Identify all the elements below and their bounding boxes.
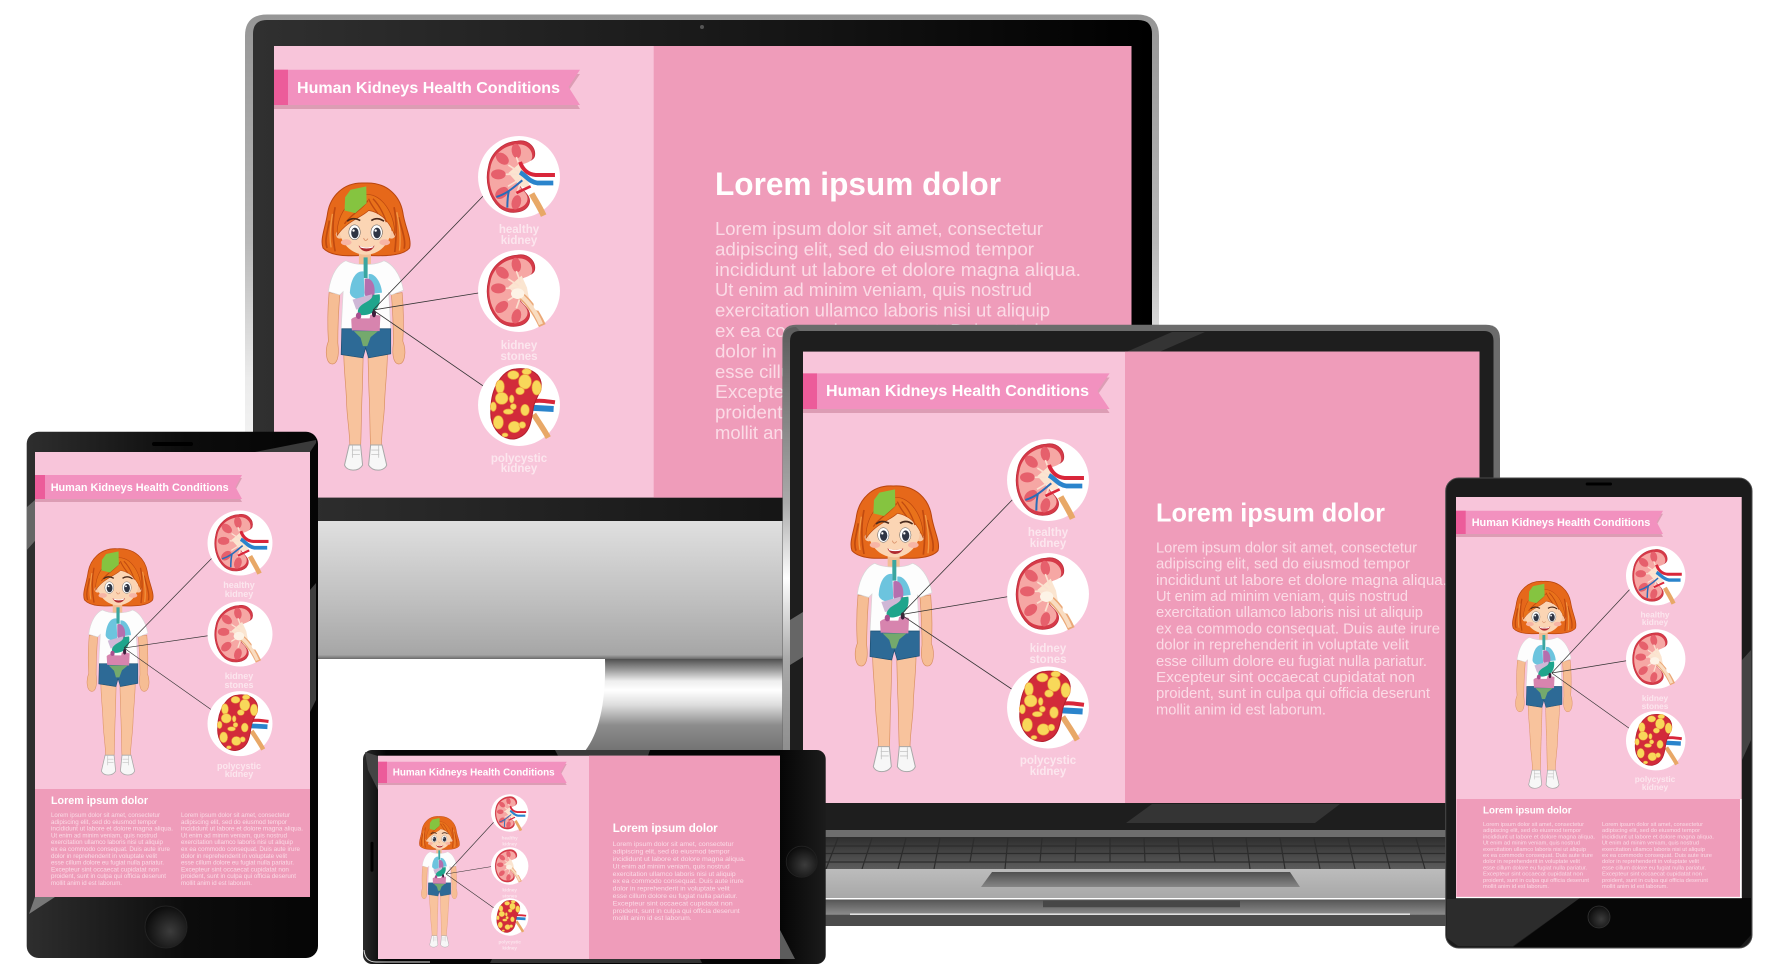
body text column 1: adipiscing elit, sed do eiusmod tempor: [51, 820, 157, 826]
kidney labels: polycystic: [217, 761, 261, 771]
tablet home button: [1588, 906, 1610, 928]
banner: [274, 70, 580, 109]
tablet body: [1446, 478, 1752, 948]
body text column 1: [51, 813, 173, 887]
body text column 1: mollit anim id est laborum.: [1483, 884, 1549, 890]
body text: incididunt ut labore et dolore magna aliqua.: [715, 260, 1081, 280]
body text column 2: Lorem ipsum dolor sit amet, consectetur: [1602, 822, 1703, 828]
monitor stand neck: [585, 659, 790, 751]
body text column 2: incididunt ut labore et dolore magna aliqua.: [181, 827, 303, 833]
kidney labels: kidney: [1642, 693, 1669, 703]
heading: Lorem ipsum dolor: [1483, 806, 1572, 817]
device: portrait phone: [27, 432, 318, 958]
heading: Lorem ipsum dolor: [51, 795, 149, 807]
monitor frame: [245, 14, 1159, 521]
kidney labels: healthy: [1640, 609, 1670, 619]
body text column 1: Excepteur sint occaecat cupidatat non: [51, 867, 159, 873]
pointer lines: [1552, 587, 1633, 731]
kidney labels: healthy: [1028, 527, 1069, 539]
trackpad: [981, 872, 1300, 887]
body text column 1: Ut enim ad minim veniam, quis nostrud: [51, 833, 157, 839]
body text column 2: Excepteur sint occaecat cupidatat non: [181, 867, 289, 873]
body text column 2: Ut enim ad minim veniam, quis nostrud: [1602, 841, 1699, 847]
tablet slide: [1456, 497, 1742, 898]
body text column 1: mollit anim id est laborum.: [51, 881, 122, 887]
body text: incididunt ut labore et dolore magna aliqua.: [1156, 573, 1447, 589]
body text column 2: proident, sunt in culpa qui officia deserunt: [181, 874, 296, 880]
body text column 1: Excepteur sint occaecat cupidatat non: [1483, 872, 1583, 878]
banner: [378, 762, 567, 785]
body text: mollit anim id est laborum.: [715, 423, 929, 443]
body text: proident, sunt in culpa qui officia deserunt: [613, 908, 740, 915]
kidney labels: kidney: [502, 888, 517, 892]
body text column 2: incididunt ut labore et dolore magna aliqua.: [1602, 834, 1714, 840]
body text: esse cillum dolore eu fugiat nulla pariatur.: [715, 362, 1055, 382]
phone slide: [35, 452, 310, 897]
body text: Excepteur sint occaecat cupidatat non: [1156, 670, 1415, 686]
body text: Excepteur sint occaecat cupidatat non: [715, 382, 1040, 402]
body text: Ut enim ad minim veniam, quis nostrud: [613, 863, 730, 870]
body text column 1: Lorem ipsum dolor sit amet, consectetur: [1483, 822, 1584, 828]
kidney labels: healthy: [223, 580, 255, 590]
body text column 1: dolor in reprehenderit in voluptate velit: [1483, 859, 1580, 865]
body text column 1: exercitation ullamco laboris nisi ut aliquip: [1483, 847, 1586, 853]
body text column 2: adipiscing elit, sed do eiusmod tempor: [1602, 828, 1700, 834]
body text: Lorem ipsum dolor sit amet, consectetur: [715, 219, 1043, 239]
kidney labels: kidney: [1030, 766, 1067, 778]
body text: mollit anim id est laborum.: [1156, 702, 1326, 718]
body text column 2: esse cillum dolore eu fugiat nulla pariatur.: [1602, 865, 1706, 871]
body text column 1: ex ea commodo consequat. Duis aute irure: [51, 847, 171, 853]
landscape phone slide: [378, 756, 780, 959]
body text column 2: mollit anim id est laborum.: [181, 881, 252, 887]
body text: esse cillum dolore eu fugiat nulla pariatur.: [613, 893, 738, 900]
body text: dolor in reprehenderit in voluptate velit: [715, 341, 1033, 361]
laptop bezel: [790, 331, 1494, 830]
pointer lines: [446, 820, 497, 910]
body text column 2: adipiscing elit, sed do eiusmod tempor: [181, 820, 287, 826]
girl anatomy figure: [419, 816, 459, 947]
monitor slide: [274, 46, 1132, 498]
heading: Lorem ipsum dolor: [715, 166, 1001, 202]
girl anatomy figure: [322, 183, 410, 470]
kidney icons: [1626, 546, 1685, 770]
device: tablet: [1446, 478, 1752, 948]
device: landscape phone: [363, 750, 826, 964]
kidney labels: kidney: [502, 842, 517, 846]
body text column 1: proident, sunt in culpa qui officia deserunt: [51, 874, 166, 880]
kidney icons: [491, 794, 528, 936]
landscape phone body: [363, 750, 826, 964]
kidney icons: [208, 511, 272, 756]
body text: ex ea commodo consequat. Duis aute irure: [715, 321, 1072, 341]
body text column 2: mollit anim id est laborum.: [1602, 884, 1668, 890]
landscape phone speaker: [370, 842, 374, 872]
laptop notch: [1043, 901, 1240, 907]
kidney labels: kidney: [1642, 782, 1669, 792]
body text column 2: Ut enim ad minim veniam, quis nostrud: [181, 833, 287, 839]
body text: [613, 841, 746, 922]
pointer lines: [901, 496, 1018, 693]
heading: Lorem ipsum dolor: [1156, 498, 1385, 528]
kidney labels: kidney: [1030, 538, 1067, 550]
kidney labels: stones: [1642, 701, 1669, 711]
body text: Ut enim ad minim veniam, quis nostrud: [715, 280, 1032, 300]
landscape phone reflections: [364, 750, 795, 963]
heading: Lorem ipsum dolor: [613, 821, 718, 835]
banner: Human Kidneys Health Conditions: [826, 383, 1089, 400]
banner: Human Kidneys Health Conditions: [51, 482, 229, 494]
kidney labels: polycystic: [1635, 774, 1676, 784]
pointer lines: [373, 193, 489, 390]
body text column 1: Ut enim ad minim veniam, quis nostrud: [1483, 841, 1580, 847]
kidney labels: kidney: [225, 671, 253, 681]
kidney labels: kidney: [501, 340, 538, 352]
phone reflections: [27, 440, 316, 914]
laptop frame: [782, 325, 1500, 830]
body text column 1: incididunt ut labore et dolore magna aliqua.: [1483, 834, 1595, 840]
kidney labels: kidney: [225, 589, 253, 599]
body text: exercitation ullamco laboris nisi ut aliquip: [1156, 605, 1423, 621]
kidney labels: healthy: [502, 836, 518, 840]
body text column 2: [1602, 822, 1714, 890]
body text column 1: adipiscing elit, sed do eiusmod tempor: [1483, 828, 1581, 834]
body text: exercitation ullamco laboris nisi ut aliquip: [715, 301, 1050, 321]
body text: exercitation ullamco laboris nisi ut aliquip: [613, 871, 736, 878]
kidney labels: healthy: [499, 224, 540, 236]
kidney labels: [491, 224, 548, 475]
kidney icons: [1007, 439, 1089, 748]
body text: Lorem ipsum dolor sit amet, consectetur: [613, 841, 735, 848]
banner: Human Kidneys Health Conditions: [1472, 517, 1650, 529]
body text column 2: esse cillum dolore eu fugiat nulla pariatur.: [181, 861, 294, 867]
body text column 1: Lorem ipsum dolor sit amet, consectetur: [51, 813, 160, 819]
kidney labels: polycystic: [491, 453, 548, 465]
landscape phone home button: [786, 846, 817, 877]
banner: Human Kidneys Health Conditions: [297, 80, 560, 97]
body text column 2: exercitation ullamco laboris nisi ut aliquip: [1602, 847, 1705, 853]
kidney labels: kidney: [1642, 617, 1669, 627]
device: desktop monitor: [245, 14, 1159, 751]
body text: incididunt ut labore et dolore magna aliqua.: [613, 856, 746, 863]
body text: Excepteur sint occaecat cupidatat non: [613, 900, 733, 907]
body text column 2: proident, sunt in culpa qui officia deserunt: [1602, 878, 1708, 884]
kidney icons: [478, 136, 560, 446]
body text: adipiscing elit, sed do eiusmod tempor: [1156, 557, 1410, 573]
kidney labels: polycystic: [1020, 755, 1077, 767]
body text column 1: exercitation ullamco laboris nisi ut aliquip: [51, 840, 164, 846]
body text column 1: ex ea commodo consequat. Duis aute irure: [1483, 853, 1593, 859]
body text column 2: ex ea commodo consequat. Duis aute irure: [181, 847, 301, 853]
body text column 1: dolor in reprehenderit in voluptate velit: [51, 854, 157, 860]
body text: dolor in reprehenderit in voluptate velit: [1156, 638, 1409, 654]
laptop slide: [803, 352, 1480, 803]
monitor chin: [250, 520, 790, 659]
tablet reflections: [1447, 650, 1751, 947]
phone body: [27, 432, 318, 958]
body text column 2: ex ea commodo consequat. Duis aute irure: [1602, 853, 1712, 859]
kidney labels: stones: [224, 680, 254, 690]
laptop base: [786, 830, 1486, 926]
body text: adipiscing elit, sed do eiusmod tempor: [715, 239, 1034, 259]
phone home button: [145, 906, 187, 948]
laptop left frame edge: [783, 327, 800, 830]
pointer lines: [124, 556, 216, 713]
kidney labels: stones: [1029, 654, 1067, 666]
body text column 2: [181, 813, 303, 887]
banner: Human Kidneys Health Conditions: [393, 768, 555, 779]
banner: [803, 373, 1110, 413]
body text column 1: incididunt ut labore et dolore magna aliqua.: [51, 827, 173, 833]
body text: [715, 219, 1081, 443]
body text column 2: Excepteur sint occaecat cupidatat non: [1602, 872, 1702, 878]
kidney labels: kidney: [502, 946, 517, 950]
body text: [1156, 540, 1447, 718]
banner: [35, 475, 242, 502]
body text column 2: Lorem ipsum dolor sit amet, consectetur: [181, 813, 290, 819]
kidney labels: [1635, 609, 1676, 792]
tablet speaker: [1586, 482, 1612, 486]
monitor camera: [700, 25, 704, 29]
banner: [1456, 511, 1663, 537]
body text: esse cillum dolore eu fugiat nulla pariatur.: [1156, 654, 1427, 670]
body text: proident, sunt in culpa qui officia deserunt: [715, 403, 1059, 423]
body text column 1: esse cillum dolore eu fugiat nulla pariatur.: [51, 861, 164, 867]
girl anatomy figure: [851, 486, 939, 772]
body text column 1: esse cillum dolore eu fugiat nulla pariatur.: [1483, 865, 1587, 871]
kidney labels: stones: [502, 894, 518, 898]
body text: ex ea commodo consequat. Duis aute irure: [613, 878, 744, 885]
kidney labels: kidney: [501, 463, 538, 475]
body text column 1: proident, sunt in culpa qui officia deserunt: [1483, 878, 1589, 884]
body text: Ut enim ad minim veniam, quis nostrud: [1156, 589, 1408, 605]
girl anatomy figure: [1512, 581, 1576, 788]
phone speaker: [152, 442, 193, 446]
body text: ex ea commodo consequat. Duis aute irure: [1156, 621, 1440, 637]
body text: proident, sunt in culpa qui officia deserunt: [1156, 686, 1430, 702]
kidney labels: [1020, 527, 1077, 778]
kidney labels: stones: [500, 351, 538, 363]
body text: Lorem ipsum dolor sit amet, consectetur: [1156, 540, 1417, 556]
body text column 2: exercitation ullamco laboris nisi ut aliquip: [181, 840, 294, 846]
kidney labels: kidney: [225, 769, 253, 779]
girl anatomy figure: [84, 549, 153, 775]
body text: mollit anim id est laborum.: [613, 915, 692, 922]
body text: dolor in reprehenderit in voluptate velit: [613, 886, 730, 893]
body text column 1: [1483, 822, 1595, 890]
monitor bezel: [253, 20, 1152, 521]
body text column 2: dolor in reprehenderit in voluptate velit: [181, 854, 287, 860]
device: laptop: [782, 325, 1500, 926]
kidney labels: polycystic: [498, 940, 521, 944]
kidney labels: kidney: [1030, 643, 1067, 655]
body text column 2: dolor in reprehenderit in voluptate velit: [1602, 859, 1699, 865]
laptop bezel reflections: [790, 332, 1340, 823]
kidney labels: [217, 580, 261, 779]
kidney labels: [498, 836, 521, 950]
kidney labels: kidney: [501, 235, 538, 247]
body text: adipiscing elit, sed do eiusmod tempor: [613, 849, 731, 856]
